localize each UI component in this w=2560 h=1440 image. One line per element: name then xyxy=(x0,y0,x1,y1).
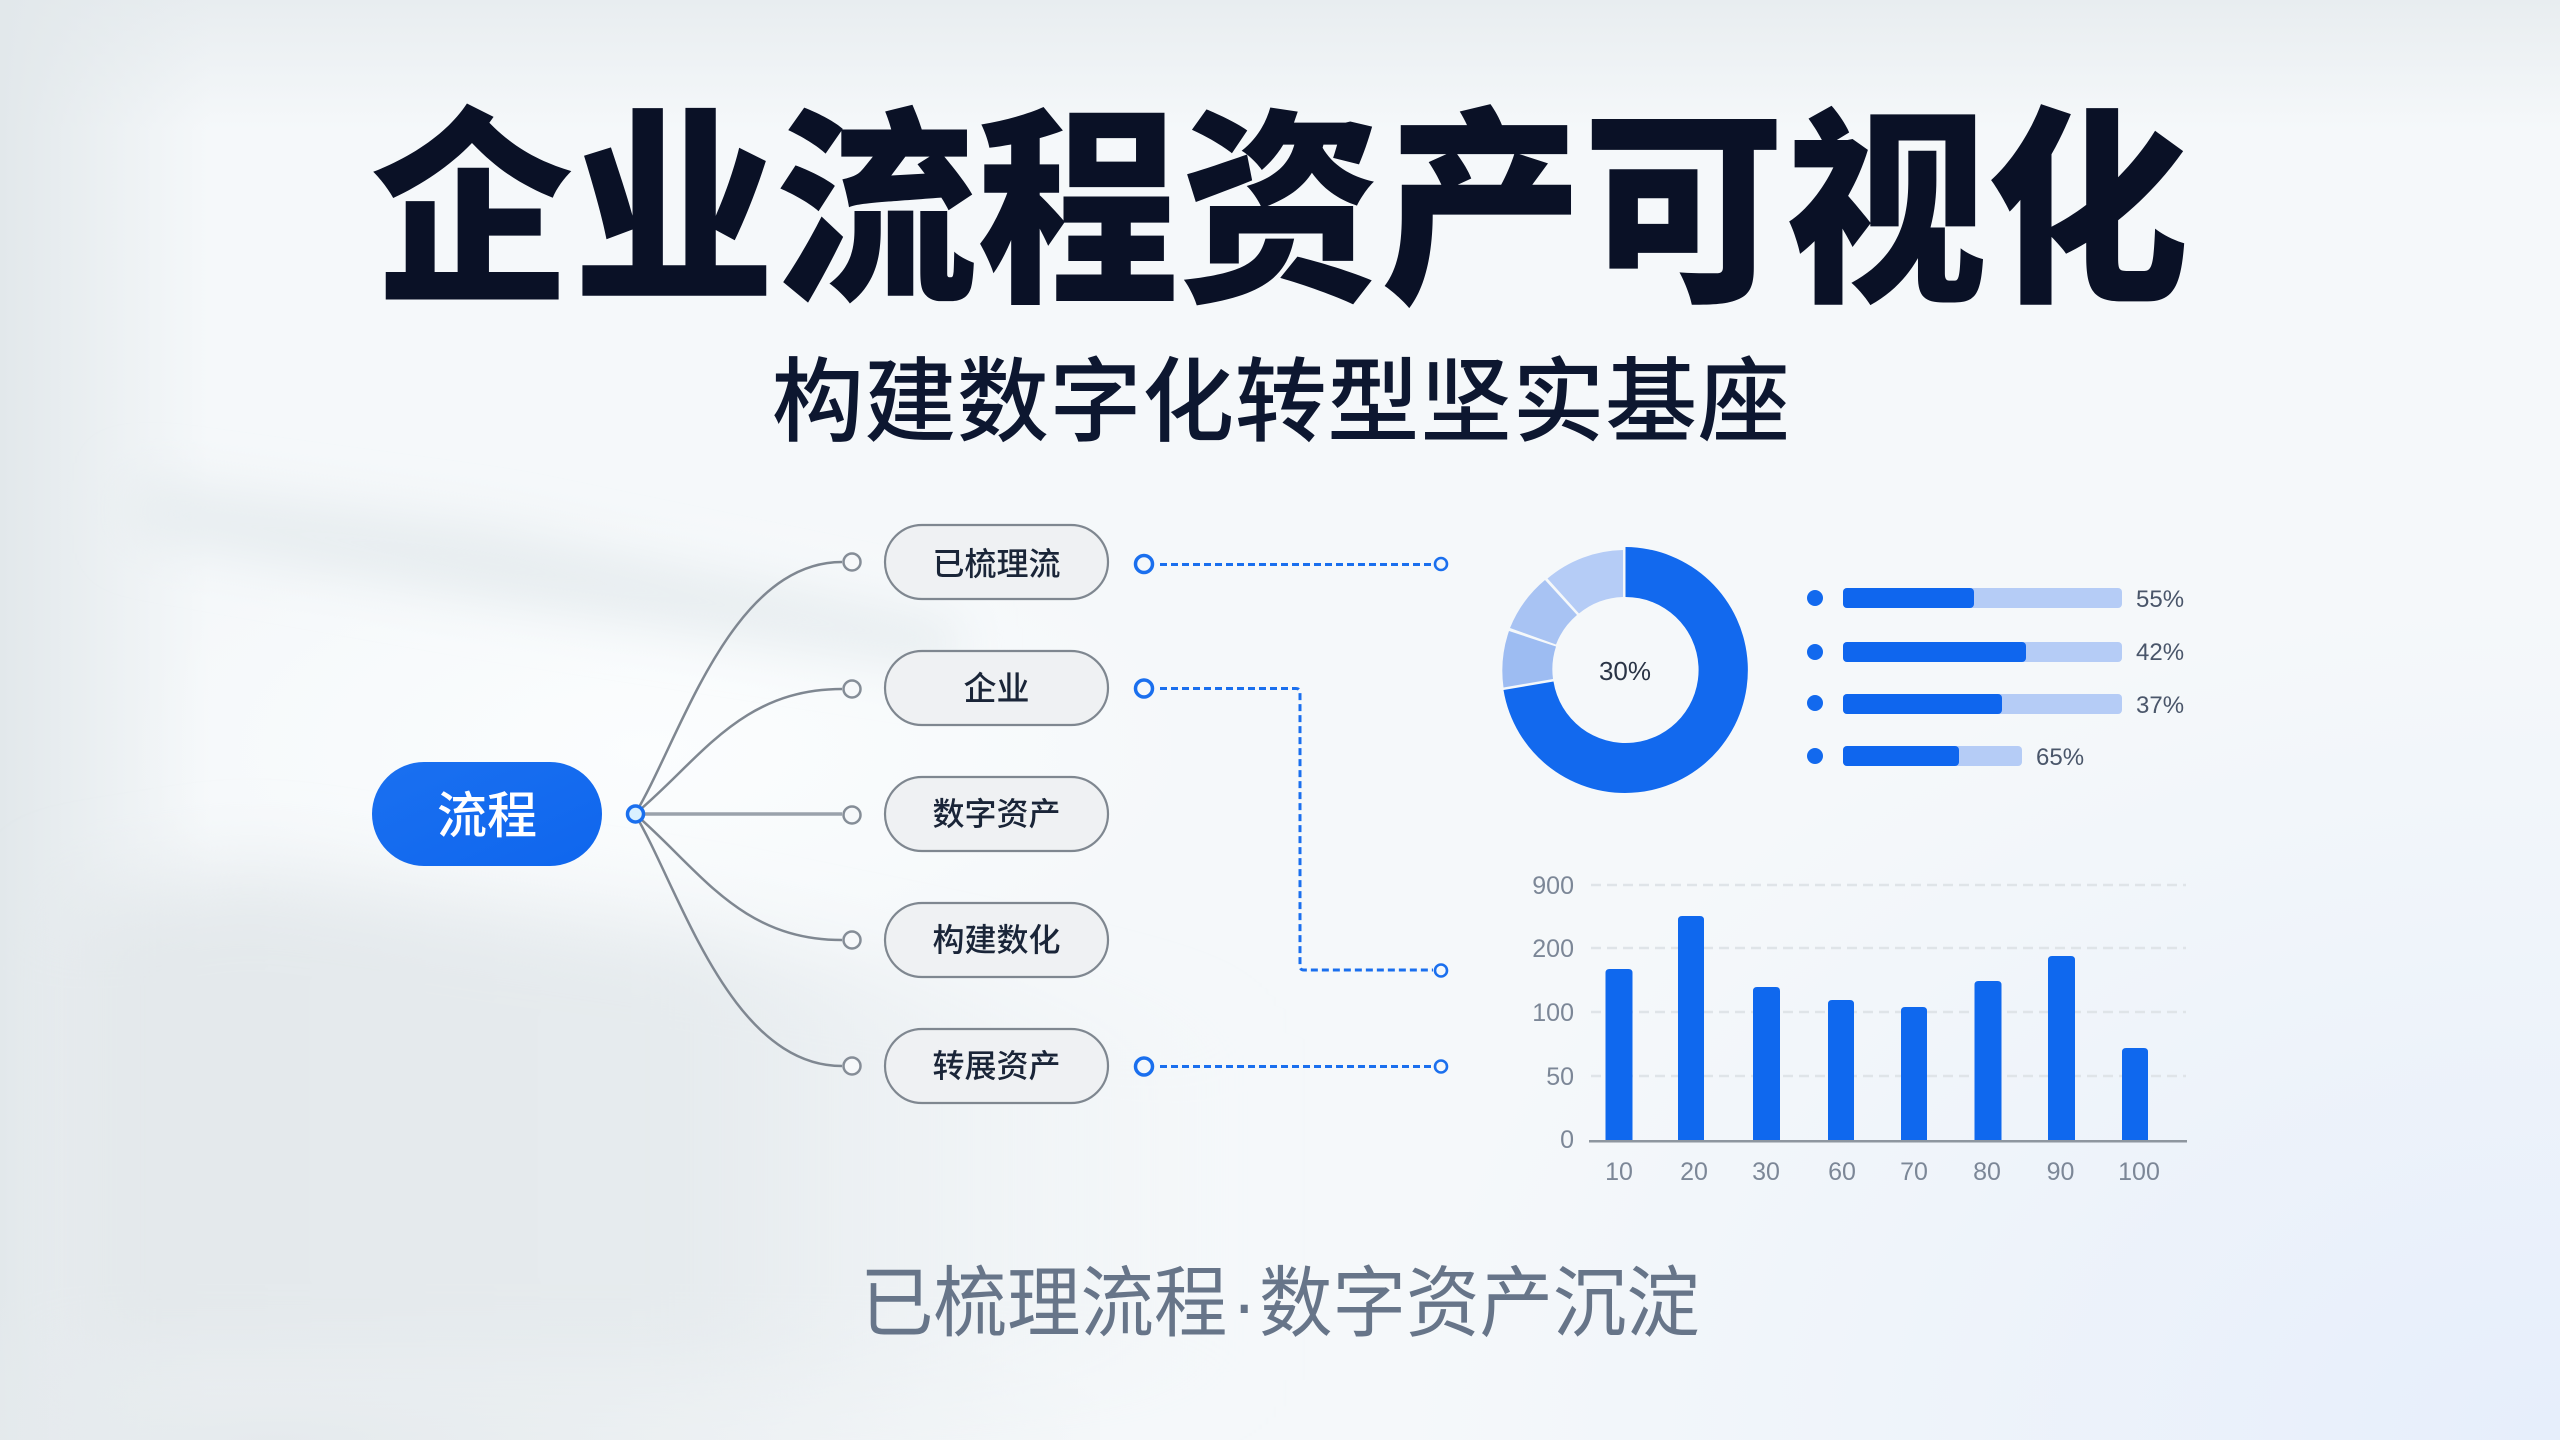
bar row 55% xyxy=(1807,586,2184,613)
node: 数字资产 xyxy=(885,777,1108,851)
x axis labels xyxy=(1605,1158,2160,1186)
light segment 1 xyxy=(1502,631,1556,688)
y axis labels: 100 xyxy=(1532,999,1574,1027)
central pill: 流程: 流程 xyxy=(437,776,537,848)
node: 转展资产: 转展资产 xyxy=(932,1041,1061,1087)
x axis labels: 100 xyxy=(2118,1158,2160,1186)
bar row 65%: 65% xyxy=(2036,744,2084,771)
node: 已梳理流: 已梳理流 xyxy=(932,539,1061,585)
x axis labels: 30 xyxy=(1752,1158,1780,1186)
donut centre label: 30% xyxy=(1599,656,1651,686)
footer caption: 已梳理流程 xyxy=(860,1241,1227,1353)
x axis line xyxy=(1589,1140,2187,1142)
x axis labels: 70 xyxy=(1900,1158,1928,1186)
bars xyxy=(1606,916,2148,1141)
node: 企业 xyxy=(885,651,1108,725)
bar row 65% xyxy=(1807,744,2084,771)
y axis labels xyxy=(1532,872,1574,1154)
subtitle: 构建数字化转型坚实基座 xyxy=(772,328,1790,461)
central pill: 流程 xyxy=(372,762,602,866)
bar row 42%: 42% xyxy=(2136,639,2184,666)
title: 企业流程资产可视化 xyxy=(371,42,2189,346)
progress bars xyxy=(1807,586,2184,771)
node: 企业: 企业 xyxy=(964,662,1030,710)
light segment 2 xyxy=(1510,580,1577,644)
footer caption: 数字资产沉淀 xyxy=(1259,1241,1700,1353)
x axis labels: 90 xyxy=(2047,1158,2074,1186)
hub dot xyxy=(628,806,644,822)
x axis labels: 10 xyxy=(1605,1158,1633,1186)
node: 数字资产: 数字资产 xyxy=(932,789,1061,835)
bar row 37%: 37% xyxy=(2136,692,2184,719)
node: 转展资产 xyxy=(885,1029,1108,1103)
mind map: process tree xyxy=(372,525,1447,1103)
footer caption: · xyxy=(1232,1260,1256,1346)
bar row 42% xyxy=(1807,639,2184,666)
bar row 37% xyxy=(1807,692,2184,719)
y axis labels: 50 xyxy=(1546,1063,1574,1091)
bar chart xyxy=(1532,872,2187,1186)
connector curves xyxy=(635,562,842,1066)
bar row 55%: 55% xyxy=(2136,586,2184,613)
footer caption xyxy=(860,1241,1700,1353)
x axis labels: 20 xyxy=(1680,1158,1708,1186)
node: 构建数化: 构建数化 xyxy=(932,915,1061,961)
node: 构建数化 xyxy=(885,903,1108,977)
node: 已梳理流 xyxy=(885,525,1108,599)
main blue segment xyxy=(1504,547,1748,793)
dashed blue links xyxy=(1160,564,1433,1066)
x axis labels: 60 xyxy=(1828,1158,1856,1186)
y axis labels: 200 xyxy=(1532,935,1574,963)
y axis labels: 0 xyxy=(1560,1126,1574,1154)
y axis labels: 900 xyxy=(1532,872,1574,900)
x axis labels: 80 xyxy=(1973,1158,2001,1186)
grid lines xyxy=(1591,885,2186,1076)
blue link end dots xyxy=(1435,558,1447,1072)
light segment 3 xyxy=(1548,550,1623,614)
blue link start dots xyxy=(1136,556,1152,1075)
grey junction dots xyxy=(844,554,860,1074)
donut chart xyxy=(1502,547,1748,793)
